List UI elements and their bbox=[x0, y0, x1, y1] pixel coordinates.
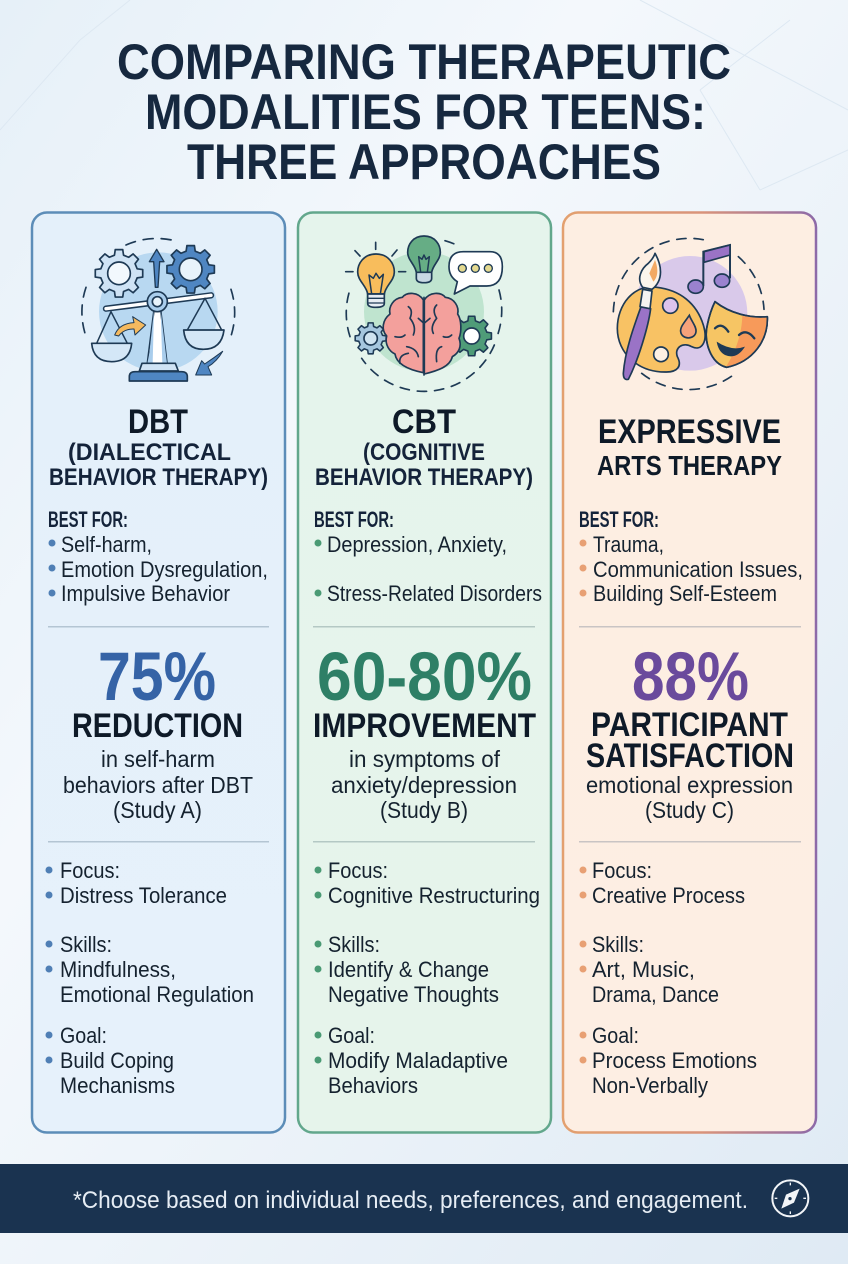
title: THREE APPROACHES bbox=[187, 134, 661, 190]
heading: Expressive Arts Therapy: EXPRESSIVE bbox=[598, 413, 781, 451]
title: MODALITIES FOR TEENS: bbox=[145, 84, 706, 140]
heading: CBT: CBT bbox=[392, 403, 456, 441]
best for list: BEST FOR: bbox=[579, 507, 659, 532]
details list: Goal: bbox=[328, 1023, 375, 1048]
best for list: Stress-Related Disorders bbox=[327, 581, 542, 606]
statistic: 88% participant satisfaction: emotional expression bbox=[586, 772, 793, 798]
details list: Art, Music, bbox=[592, 957, 695, 982]
details list: Focus: bbox=[328, 858, 388, 883]
statistic: 75% reduction: 75% bbox=[98, 638, 216, 715]
details list bbox=[580, 858, 757, 1098]
details list: Emotional Regulation bbox=[60, 982, 254, 1007]
heading: CBT bbox=[315, 403, 533, 491]
details list: Goal: bbox=[592, 1023, 639, 1048]
details list: Modify Maladaptive bbox=[328, 1048, 508, 1073]
heading: DBT: DBT bbox=[128, 403, 188, 441]
best for list bbox=[314, 507, 542, 606]
details list bbox=[314, 858, 540, 1098]
details list: Creative Process bbox=[592, 883, 745, 908]
statistic: 88% participant satisfaction: SATISFACTION bbox=[586, 737, 794, 775]
statistic: 88% participant satisfaction bbox=[586, 638, 794, 823]
heading: DBT: BEHAVIOR THERAPY) bbox=[49, 464, 268, 491]
best for list: Emotion Dysregulation, bbox=[61, 557, 268, 582]
icon: compass bbox=[772, 1180, 808, 1216]
details list: Non-Verbally bbox=[592, 1073, 709, 1098]
details list: Drama, Dance bbox=[592, 982, 719, 1007]
best for list: BEST FOR: bbox=[314, 507, 394, 532]
heading: CBT: (COGNITIVE bbox=[363, 439, 485, 466]
best for list: Impulsive Behavior bbox=[61, 581, 230, 606]
statistic: 75% reduction: (Study A) bbox=[113, 797, 202, 823]
panel: DBT bbox=[32, 212, 285, 1132]
details list: Cognitive Restructuring bbox=[328, 883, 540, 908]
details list: Focus: bbox=[592, 858, 652, 883]
statistic: 60-80% improvement: (Study B) bbox=[380, 797, 468, 823]
statistic: 75% reduction: REDUCTION bbox=[72, 707, 243, 745]
details list bbox=[46, 858, 254, 1098]
icon: palette, music note and mask bbox=[613, 238, 767, 390]
heading: Expressive Arts Therapy: ARTS THERAPY bbox=[597, 450, 782, 481]
title: COMPARING THERAPEUTIC bbox=[117, 34, 731, 90]
statistic: 88% participant satisfaction: PARTICIPANT bbox=[591, 706, 788, 744]
best for list bbox=[579, 507, 803, 606]
heading: DBT: (DIALECTICAL bbox=[68, 439, 231, 466]
statistic: 88% participant satisfaction: (Study C) bbox=[645, 797, 734, 823]
footer banner bbox=[0, 1164, 848, 1233]
details list: Distress Tolerance bbox=[60, 883, 227, 908]
footer note: *Choose based on individual needs, preferences, and engagement. bbox=[73, 1187, 748, 1214]
best for list: Trauma, bbox=[593, 532, 664, 557]
details list: Identify & Change bbox=[328, 957, 489, 982]
statistic: 75% reduction: in self-harm bbox=[101, 746, 215, 772]
best for list: Depression, Anxiety, bbox=[327, 532, 507, 557]
statistic: 88% participant satisfaction: 88% bbox=[632, 638, 749, 715]
heading: Expressive Arts Therapy bbox=[597, 413, 782, 481]
heading: DBT bbox=[49, 403, 268, 491]
panel: Expressive Arts bbox=[563, 212, 816, 1132]
statistic: 75% reduction: behaviors after DBT bbox=[63, 772, 253, 798]
details list: Focus: bbox=[60, 858, 120, 883]
details list: Behaviors bbox=[328, 1073, 418, 1098]
best for list: Communication Issues, bbox=[593, 557, 803, 582]
statistic: 60-80% improvement: IMPROVEMENT bbox=[313, 707, 536, 745]
details list: Skills: bbox=[328, 932, 380, 957]
statistic: 60-80% improvement: 60-80% bbox=[317, 638, 532, 715]
statistic: 60-80% improvement: in symptoms of bbox=[349, 746, 501, 772]
details list: Skills: bbox=[60, 932, 112, 957]
icon: balance scale with gears bbox=[82, 239, 235, 381]
best for list: Building Self-Esteem bbox=[593, 581, 777, 606]
best for list: BEST FOR: bbox=[48, 507, 128, 532]
details list: Goal: bbox=[60, 1023, 107, 1048]
details list: Mechanisms bbox=[60, 1073, 175, 1098]
details list: Mindfulness, bbox=[60, 957, 176, 982]
statistic: 60-80% improvement bbox=[313, 638, 536, 823]
statistic: 75% reduction bbox=[63, 638, 253, 823]
details list: Skills: bbox=[592, 932, 644, 957]
statistic: 60-80% improvement: anxiety/depression bbox=[331, 772, 517, 798]
details list: Negative Thoughts bbox=[328, 982, 499, 1007]
best for list: Self-harm, bbox=[61, 532, 152, 557]
details list: Build Coping bbox=[60, 1048, 174, 1073]
best for list bbox=[48, 507, 268, 606]
details list: Process Emotions bbox=[592, 1048, 757, 1073]
title bbox=[117, 34, 731, 190]
heading: CBT: BEHAVIOR THERAPY) bbox=[315, 464, 533, 491]
panel: CBT bbox=[298, 212, 551, 1132]
icon: brain with bulbs and gears bbox=[346, 236, 502, 391]
